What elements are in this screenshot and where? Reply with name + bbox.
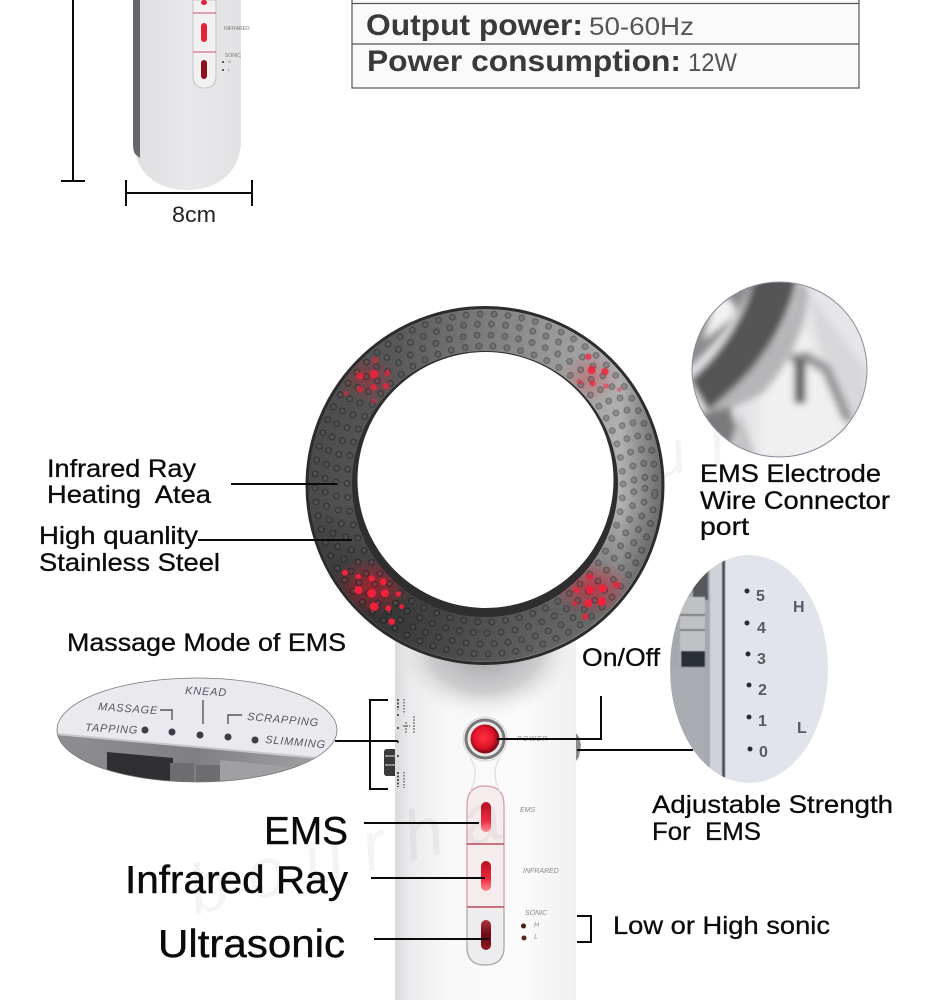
inset: adjustable strength dial: 1: [758, 713, 767, 730]
leader line: stainless steel: [198, 539, 352, 541]
label: EMS: EMS: [264, 810, 348, 853]
label: ultrasonic: Ultrasonic: [158, 923, 345, 966]
inset: adjustable strength dial: 5: [756, 588, 765, 605]
inset: massage mode selector: SLIMMING: [265, 734, 326, 751]
bracket: sonic levels: [577, 916, 591, 942]
main device handle: L: [534, 934, 538, 941]
width dimension line with 8cm label: 8cm: [172, 202, 216, 227]
label: adjustable strength: [652, 791, 893, 846]
height dimension line: [61, 0, 85, 181]
label: low or high sonic: Low or High sonic: [613, 912, 830, 940]
inset: adjustable strength dial: L: [797, 720, 807, 737]
label: EMS electrode wire connector port: port: [700, 513, 749, 541]
leader line: infrared ray: [371, 877, 485, 879]
red LED dots: [342, 353, 622, 625]
inset: adjustable strength dial: 2: [758, 682, 767, 699]
power button: [463, 717, 507, 761]
main device handle: [384, 640, 581, 1000]
label: stainless steel: [39, 522, 220, 577]
leader line: adjustable strength: [577, 749, 693, 751]
label: infrared ray heating area: [47, 455, 211, 509]
main device handle: EMS: [520, 807, 536, 814]
main device handle: INFRARED: [523, 868, 559, 875]
leader line: on/off: [497, 696, 601, 739]
specification table: [352, 0, 859, 88]
label: stainless steel: Stainless Steel: [39, 549, 220, 577]
label: infrared ray: Infrared Ray: [125, 859, 349, 902]
faint watermark: upper: bourha: [527, 377, 854, 522]
label: EMS electrode wire connector port: EMS Electrode: [700, 460, 881, 488]
label: adjustable strength: Adjustable Strength: [652, 791, 893, 819]
inset: adjustable strength dial: H: [793, 599, 805, 616]
button well: [467, 786, 504, 965]
inset: massage mode selector: MASSAGE: [98, 701, 158, 717]
inset: massage mode selector: TAPPING: [85, 722, 138, 737]
main device handle: POWER: [517, 736, 548, 743]
top device: lower part of handle: INFRARED: [224, 26, 250, 32]
inset: adjustable strength dial: 0: [759, 744, 768, 761]
top device: lower part of handle: L: [228, 67, 231, 72]
leader line: ultrasonic: [374, 938, 489, 940]
width dimension line with 8cm label: [126, 180, 252, 227]
top device: lower part of handle: H: [228, 59, 231, 64]
label: EMS electrode wire connector port: Wire Connector: [700, 487, 890, 515]
main device handle: H: [534, 922, 540, 929]
specification table: Power consumption:: [367, 45, 681, 78]
inset: massage mode selector: [50, 678, 340, 790]
label: stainless steel: High quanlity: [39, 522, 199, 550]
red infrared glows: [332, 352, 632, 616]
label: infrared ray heating area: Infrared Ray: [47, 455, 197, 483]
label: EMS electrode wire connector port: [700, 460, 890, 541]
inset: EMS electrode wire connector port: [680, 270, 880, 470]
perforated dots: [304, 303, 666, 665]
specification table: 12W: [688, 49, 737, 77]
indicator: EMS: [481, 802, 491, 832]
right side switch: [576, 733, 581, 761]
leader line: heating area: [231, 483, 337, 485]
side slider: [384, 749, 395, 776]
indicator: ultrasonic: [481, 920, 491, 950]
top device: lower part of handle: [133, 0, 250, 190]
indicator: infrared: [481, 861, 491, 891]
inset: massage mode selector: KNEAD: [185, 685, 227, 699]
label: on/off: On/Off: [582, 644, 660, 672]
heading: massage mode of EMS: Massage Mode of EMS: [67, 629, 346, 657]
inset: adjustable strength dial: 4: [757, 620, 766, 637]
inset: massage mode selector: SCRAPPING: [247, 711, 320, 729]
spec: output power: Output power:: [366, 9, 583, 42]
leader line: EMS: [364, 822, 479, 824]
side mode markings: [398, 699, 414, 788]
main device handle: SONIC: [525, 910, 548, 917]
bracket and leader: massage mode: [335, 700, 398, 789]
inner bezel and opening: [352, 351, 618, 617]
faint watermark: lower: bourha: [180, 776, 509, 930]
label: adjustable strength: For EMS: [652, 818, 761, 846]
top device: lower part of handle: SONIC: [225, 53, 241, 59]
label: infrared ray heating area: Heating Atea: [47, 481, 211, 509]
main device ring head: [304, 303, 666, 665]
inset: adjustable strength dial: [670, 555, 828, 783]
specification table: 50-60Hz: [589, 13, 694, 41]
inset: adjustable strength dial: 3: [757, 651, 766, 668]
